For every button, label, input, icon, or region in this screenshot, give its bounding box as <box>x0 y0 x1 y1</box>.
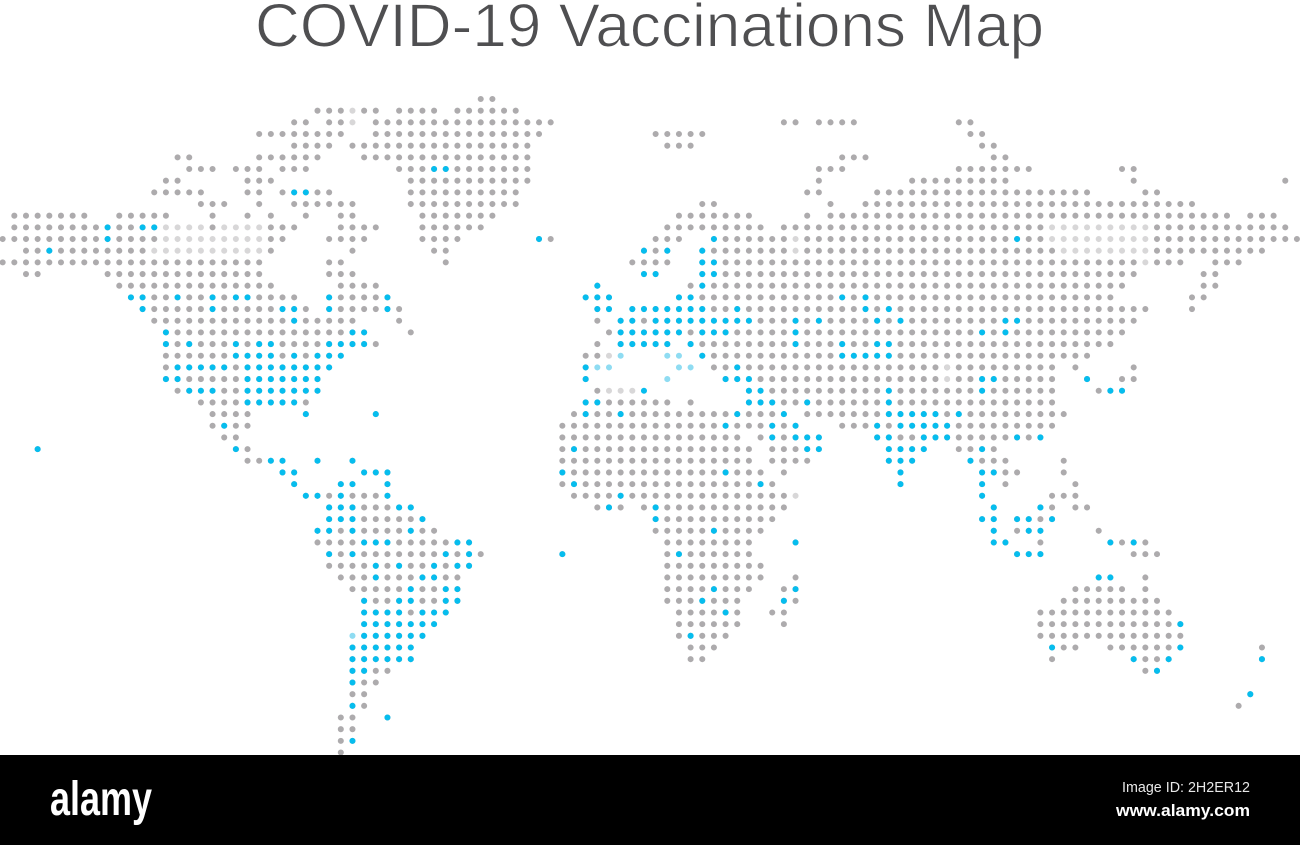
alamy logo: alamy <box>50 773 152 826</box>
footer bar <box>0 755 1300 845</box>
grey land dots <box>3 99 1298 753</box>
pale blue fading dots <box>352 356 692 636</box>
dotted world map <box>3 99 1298 753</box>
website: www.alamy.com <box>1115 801 1250 820</box>
faded glare dots <box>154 111 1147 496</box>
image id: Image ID: 2H2ER12 <box>1122 779 1250 796</box>
blue vaccination dots <box>38 169 1263 741</box>
